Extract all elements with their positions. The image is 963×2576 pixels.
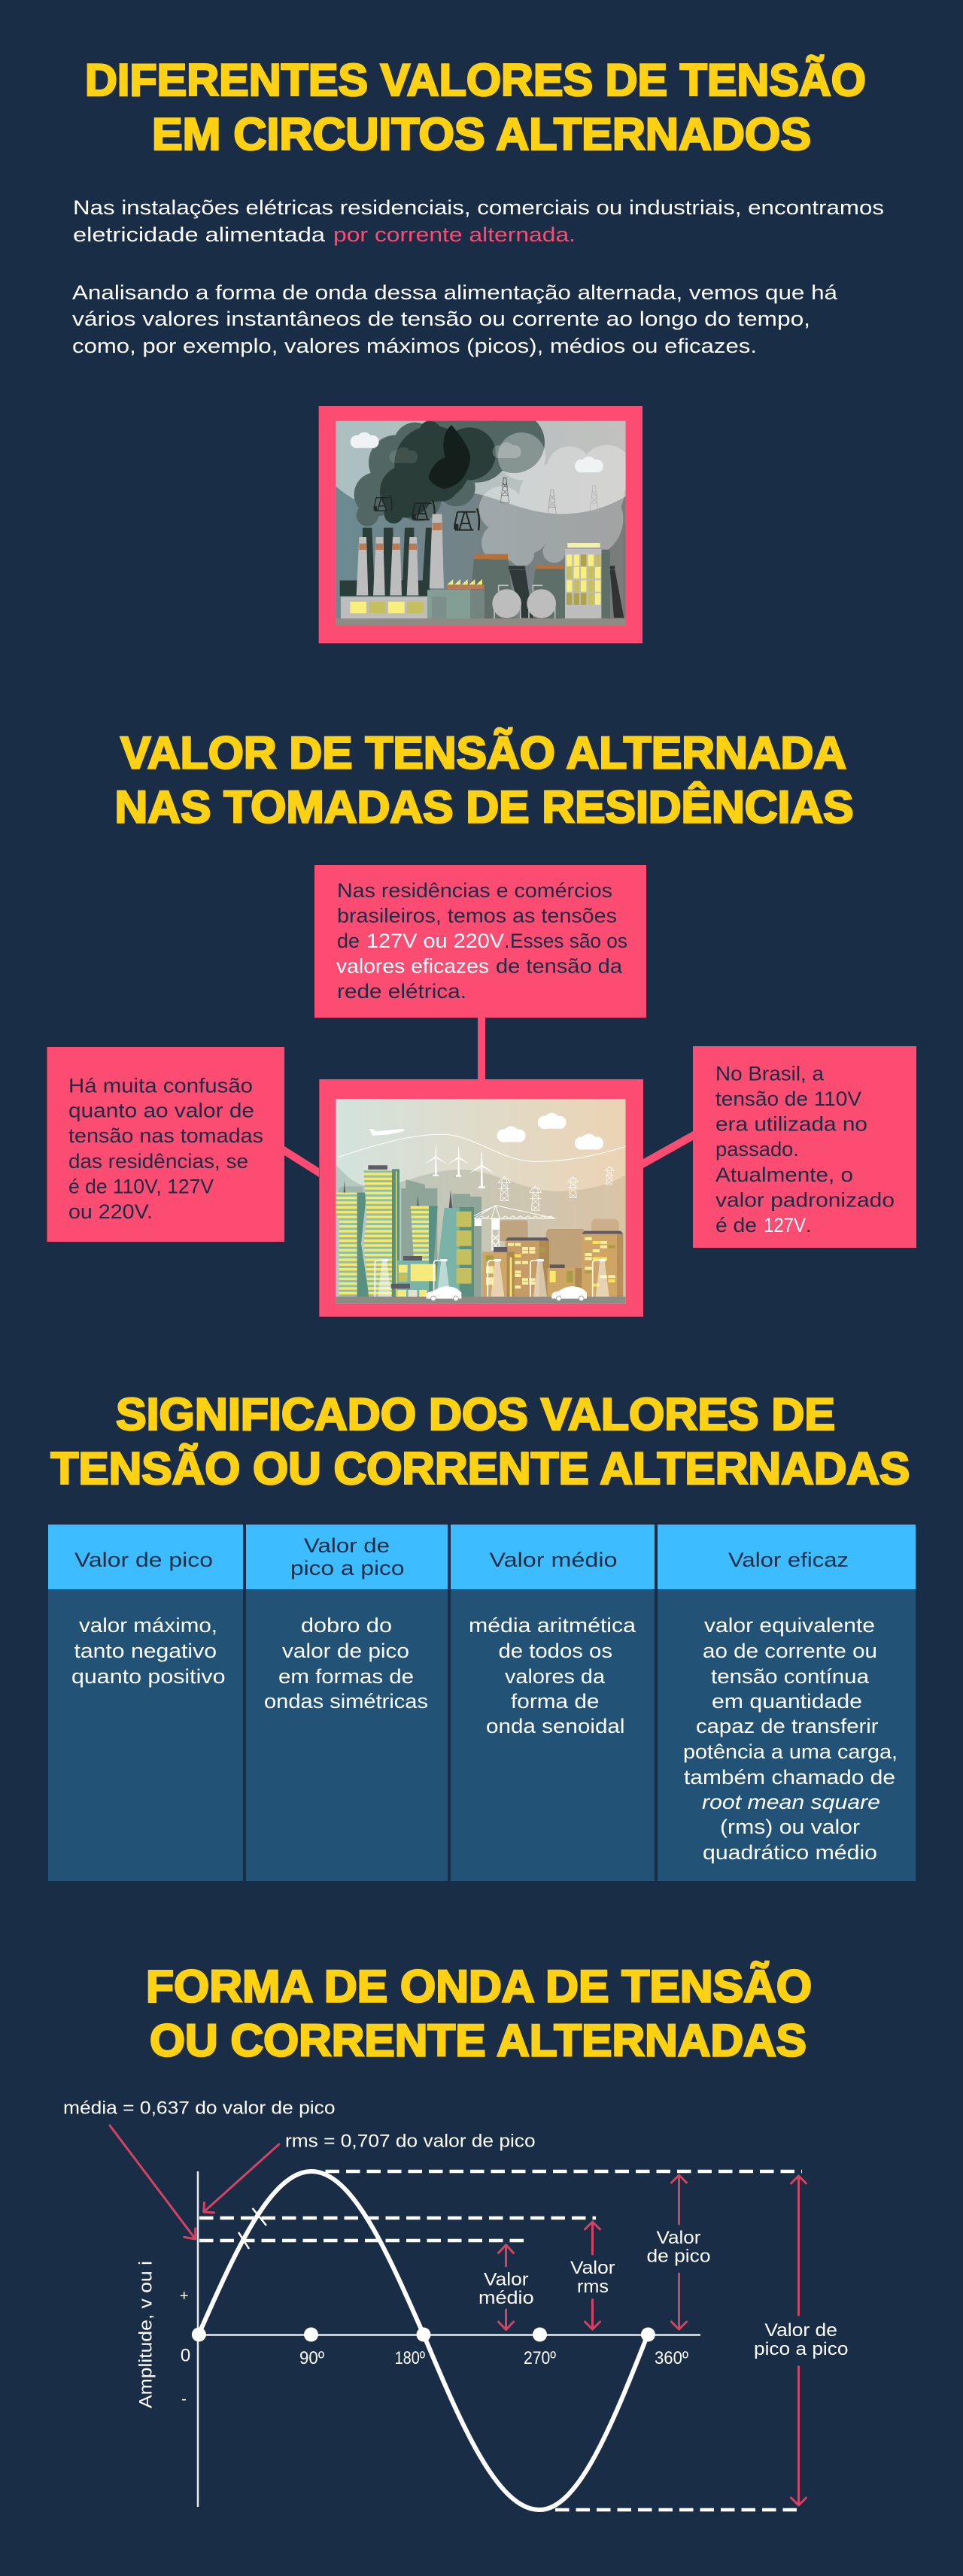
axis signs and ticks: - xyxy=(181,2391,187,2408)
heading: valor nas tomadas xyxy=(114,728,853,833)
heading: significado dos valores: TENSÃO OU CORRENTE ALTERNADAS xyxy=(50,1443,910,1494)
axis signs and ticks: 270º xyxy=(524,2348,556,2368)
axis points xyxy=(192,2327,655,2342)
axis signs and ticks: 90º xyxy=(299,2348,324,2368)
table: valor de pico a pico: Valor de xyxy=(304,1534,390,1557)
callout: 110V no passado: . xyxy=(806,1214,812,1236)
axis signs and ticks: 360º xyxy=(655,2348,688,2368)
callout: tensões brasileiras: Esses são os xyxy=(510,930,627,952)
arrows: valor de pico a pico xyxy=(791,2176,807,2505)
illustration: city xyxy=(319,1079,643,1317)
table: valor eficaz: root mean square xyxy=(702,1791,880,1813)
heading: valor nas tomadas: NAS TOMADAS DE RESIDÊNCIAS xyxy=(114,782,853,833)
table: valor médio: Valor médio xyxy=(489,1549,617,1571)
callout: tensões brasileiras xyxy=(314,865,646,1018)
intro paragraph 1: Nas instalações elétricas residenciais, comerciais ou industriais, encontramos xyxy=(73,196,884,219)
intro paragraph 1: eletricidade alimentada xyxy=(73,223,326,246)
axis signs and ticks xyxy=(180,2288,688,2408)
title: DIFERENTES VALORES DE TENSÃO xyxy=(85,55,866,105)
callout: confusão sobre tensão: quanto ao valor de xyxy=(68,1100,254,1122)
table: valor eficaz: ao de corrente ou xyxy=(703,1640,877,1662)
table: valor médio: média aritmética xyxy=(469,1614,636,1637)
table: valor de pico: Valor de pico xyxy=(74,1549,213,1571)
callout: 110V no passado: tensão de 110V xyxy=(715,1088,861,1110)
heading: forma de onda xyxy=(146,1962,812,2066)
table: valor de pico xyxy=(48,1525,243,1881)
label: valor de pico xyxy=(647,2228,710,2267)
callout: 110V no passado: 127V xyxy=(764,1214,806,1236)
table: valor de pico a pico: em formas de xyxy=(278,1665,414,1688)
table: valor médio: onda senoidal xyxy=(486,1715,624,1737)
label: valor médio: médio xyxy=(478,2288,534,2308)
intro paragraph 2: como, por exemplo, valores máximos (picos), médios ou eficazes. xyxy=(72,335,757,357)
connector: right callout to city xyxy=(643,1131,693,1168)
table: valor de pico: quanto positivo xyxy=(71,1665,226,1688)
arrows: valor médio xyxy=(498,2245,513,2330)
callout: tensões brasileiras: rede elétrica. xyxy=(337,980,466,1003)
callout: tensões brasileiras: 127V ou 220V xyxy=(366,930,504,952)
arrows: valor rms xyxy=(585,2222,600,2329)
label: valor médio xyxy=(478,2269,534,2308)
table: valor eficaz: Valor eficaz xyxy=(728,1549,849,1571)
crossing marks xyxy=(238,2208,266,2249)
table: valor de pico a pico: pico a pico xyxy=(290,1557,405,1579)
table: valor eficaz: também chamado de xyxy=(684,1766,895,1789)
arrow: rms xyxy=(204,2144,279,2213)
heading: significado dos valores: SIGNIFICADO DOS VALORES DE xyxy=(116,1389,835,1440)
callout: 110V no passado xyxy=(693,1046,916,1248)
table: valor eficaz: (rms) ou valor xyxy=(720,1816,860,1838)
table: valor de pico: valor máximo, xyxy=(79,1614,217,1637)
label: valor de pico: de pico xyxy=(647,2247,710,2267)
label: valor rms xyxy=(570,2258,615,2297)
callout: tensões brasileiras: de xyxy=(337,930,360,952)
title xyxy=(85,55,866,159)
callout: confusão sobre tensão xyxy=(47,1047,284,1242)
label: valor rms: rms xyxy=(577,2277,609,2297)
intro paragraph 1: por corrente alternada. xyxy=(333,223,576,246)
table: valor eficaz: quadrático médio xyxy=(703,1841,877,1864)
callout: confusão sobre tensão: Há muita confusão xyxy=(68,1075,253,1097)
table: valor de pico a pico: ondas simétricas xyxy=(264,1690,428,1713)
label: valor médio: Valor xyxy=(484,2269,529,2289)
callout: confusão sobre tensão: das residências, se xyxy=(68,1150,248,1173)
callout: confusão sobre tensão: tensão nas tomadas xyxy=(68,1124,263,1147)
dashed reference lines xyxy=(199,2171,802,2510)
callout: tensões brasileiras: brasileiros, temos as tensões xyxy=(337,904,617,927)
axis signs and ticks: + xyxy=(180,2288,189,2304)
table: valor médio: de todos os xyxy=(498,1640,612,1662)
label: valor de pico a pico xyxy=(754,2320,849,2359)
label: valor de pico a pico: Valor de xyxy=(764,2320,837,2341)
intro paragraph 2 xyxy=(72,281,838,357)
label: valor rms: Valor xyxy=(570,2258,615,2278)
heading: valor nas tomadas: VALOR DE TENSÃO ALTERNADA xyxy=(120,728,846,778)
label: valor de pico a pico: pico a pico xyxy=(754,2339,849,2359)
table: valor eficaz: em quantidade xyxy=(712,1690,862,1713)
callout: 110V no passado: valor padronizado xyxy=(715,1188,895,1211)
connector: left callout to city xyxy=(284,1146,319,1177)
callout: 110V no passado: era utilizada no xyxy=(715,1113,867,1136)
table: valor de pico: tanto negativo xyxy=(74,1640,217,1662)
chart: waveform xyxy=(63,2098,849,2510)
sine curve xyxy=(199,2171,648,2510)
table: valor de pico a pico: valor de pico xyxy=(282,1640,409,1662)
table: valor eficaz: capaz de transferir xyxy=(696,1715,879,1737)
callout: tensões brasileiras: de tensão da xyxy=(496,955,623,978)
label: valor de pico: Valor xyxy=(656,2228,701,2248)
y axis label: Amplitude, v ou i xyxy=(136,2261,156,2408)
callout: 110V no passado: No Brasil, a xyxy=(715,1062,825,1085)
callout: confusão sobre tensão: ou 220V. xyxy=(68,1200,153,1223)
axis signs and ticks: 180º xyxy=(395,2348,425,2368)
intro paragraph 2: vários valores instantâneos de tensão ou corrente ao longo do tempo, xyxy=(72,308,810,330)
arrow: média xyxy=(110,2125,196,2239)
callout: tensões brasileiras: Nas residências e comércios xyxy=(337,879,612,902)
callout: tensões brasileiras: . xyxy=(504,930,510,952)
callout: 110V no passado: Atualmente, o xyxy=(715,1164,853,1186)
illustration: polluting power plant xyxy=(319,404,643,643)
callout: confusão sobre tensão: é de 110V, 127V xyxy=(68,1176,214,1198)
label: média: média = 0,637 do valor de pico xyxy=(63,2098,336,2119)
heading: significado dos valores xyxy=(50,1389,910,1494)
table: valor de pico a pico: dobro do xyxy=(301,1614,392,1637)
table: valor médio xyxy=(451,1525,655,1881)
callout: 110V no passado: passado. xyxy=(715,1138,799,1161)
table: valor eficaz: potência a uma carga, xyxy=(683,1740,898,1763)
table: valor médio: valores da xyxy=(505,1665,606,1688)
table: valor eficaz xyxy=(658,1525,916,1881)
connector: top callout to city xyxy=(478,1015,485,1083)
axes xyxy=(198,2171,700,2507)
title: EM CIRCUITOS ALTERNADOS xyxy=(152,109,811,159)
table: valor de pico a pico xyxy=(246,1525,448,1881)
intro paragraph 2: Analisando a forma de onda dessa alimentação alternada, vemos que há xyxy=(72,281,838,304)
arrows: valor de pico xyxy=(671,2175,686,2329)
table: valor eficaz: valor equivalente xyxy=(704,1614,875,1637)
axis signs and ticks: 0 xyxy=(181,2346,190,2366)
callout: 110V no passado: é de xyxy=(715,1214,757,1236)
heading: forma de onda: FORMA DE ONDA DE TENSÃO xyxy=(146,1962,812,2012)
intro paragraph 1 xyxy=(73,196,884,246)
table: valor eficaz: tensão contínua xyxy=(711,1665,870,1688)
heading: forma de onda: OU CORRENTE ALTERNADAS xyxy=(150,2016,807,2066)
label: rms: rms = 0,707 do valor de pico xyxy=(285,2131,536,2152)
table: valor médio: forma de xyxy=(511,1690,599,1713)
callout: tensões brasileiras: valores eficazes xyxy=(336,955,489,978)
